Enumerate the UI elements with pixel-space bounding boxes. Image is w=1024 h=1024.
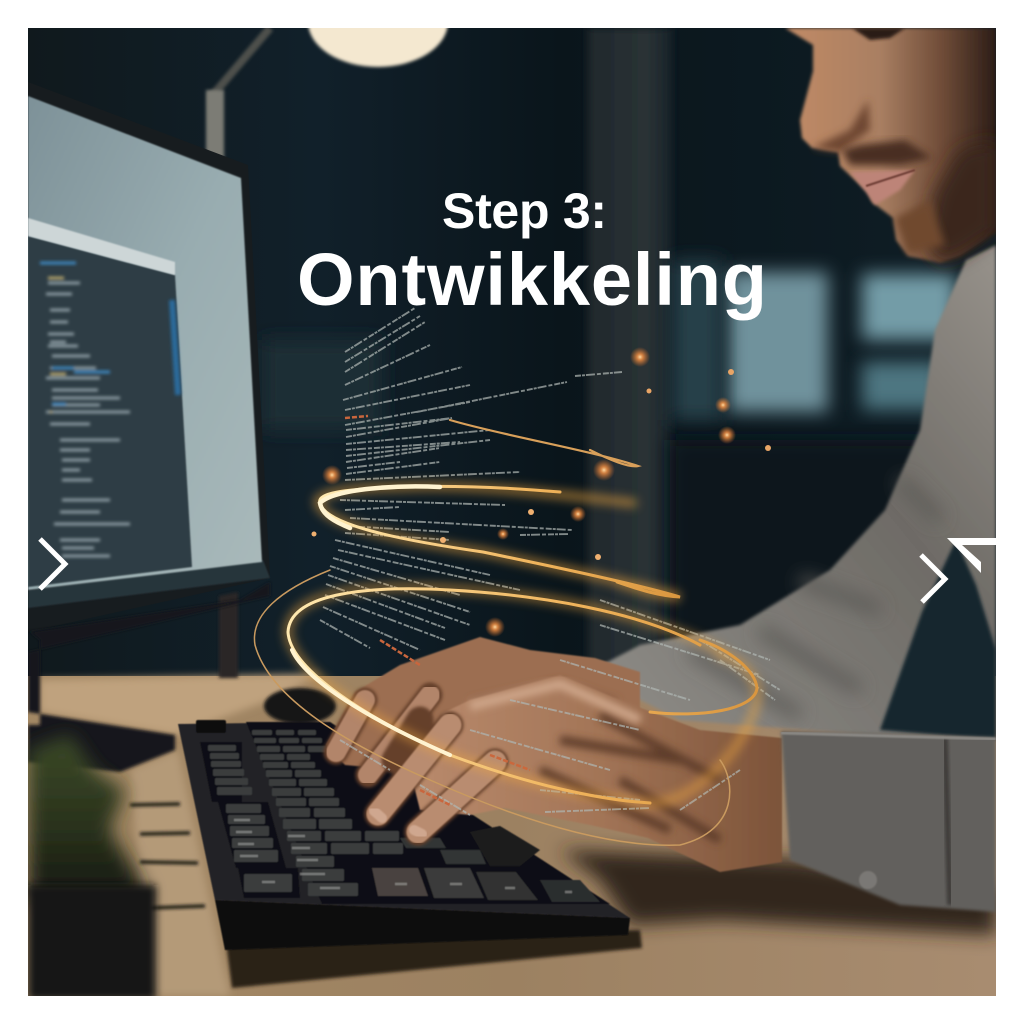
lips (850, 170, 915, 205)
upper ring highlight (320, 486, 440, 528)
moustache (842, 140, 932, 165)
hand tendon shading (540, 715, 720, 840)
back hand shadow (476, 691, 612, 697)
upper ring glow (318, 486, 680, 597)
outer thin ring (254, 570, 730, 845)
front hand (374, 675, 782, 872)
back hand finger shadows (336, 695, 430, 775)
editor title bar (28, 218, 175, 275)
heading: step number: Step 3: (442, 183, 607, 239)
key highlights (234, 820, 572, 892)
holographic code lines (320, 308, 780, 815)
typing hands (326, 637, 782, 872)
back hand fingers (336, 695, 430, 775)
monitor stand and base (219, 592, 238, 678)
front hand finger shadows (378, 720, 495, 832)
plant and pot (28, 735, 156, 1000)
keyboard front edge (215, 900, 630, 950)
keyboard (178, 720, 630, 950)
red code accents (345, 416, 530, 805)
nose shadow (812, 100, 870, 152)
keyboard main keys (252, 730, 403, 896)
shirt cuff (781, 731, 996, 912)
cuff button (859, 871, 877, 889)
fingernails (374, 811, 422, 834)
keyboard bottom row (372, 868, 428, 896)
keyboard function keys (208, 745, 292, 892)
icon: right chevron (921, 555, 945, 602)
back hand (326, 637, 640, 775)
beard (925, 140, 996, 263)
lower ring glow (288, 587, 757, 803)
lower ring core (288, 589, 757, 803)
glowing particles (312, 347, 771, 637)
keyboard power button (196, 720, 226, 733)
monitor (28, 82, 336, 772)
heading: Ontwikkeling: Ontwikkeling (297, 238, 767, 321)
upper ring core (320, 486, 680, 597)
hand highlight (470, 684, 640, 720)
desk lamp (204, 28, 450, 156)
man's face (785, 28, 996, 263)
dark wedge between arm and torso (880, 540, 996, 740)
lower ring highlight (292, 650, 450, 755)
eye and brow (852, 28, 905, 40)
man's shirt and arm (596, 245, 996, 740)
monitor screen (28, 96, 262, 590)
front hand fingers (378, 725, 495, 832)
icon: left chevron (40, 539, 65, 589)
icon: corner arrow (947, 538, 996, 573)
desk surface (28, 674, 996, 996)
monitor bottom bezel (28, 560, 270, 608)
golden light spirals (254, 420, 757, 845)
shirt folds (690, 480, 940, 715)
mouse (264, 688, 336, 724)
keyboard body (178, 722, 630, 918)
top swoosh (450, 420, 638, 466)
keyboard key wells (200, 722, 610, 904)
blurred office background (28, 28, 996, 676)
code editor window on screen (28, 236, 192, 587)
editor code lines (40, 263, 178, 556)
